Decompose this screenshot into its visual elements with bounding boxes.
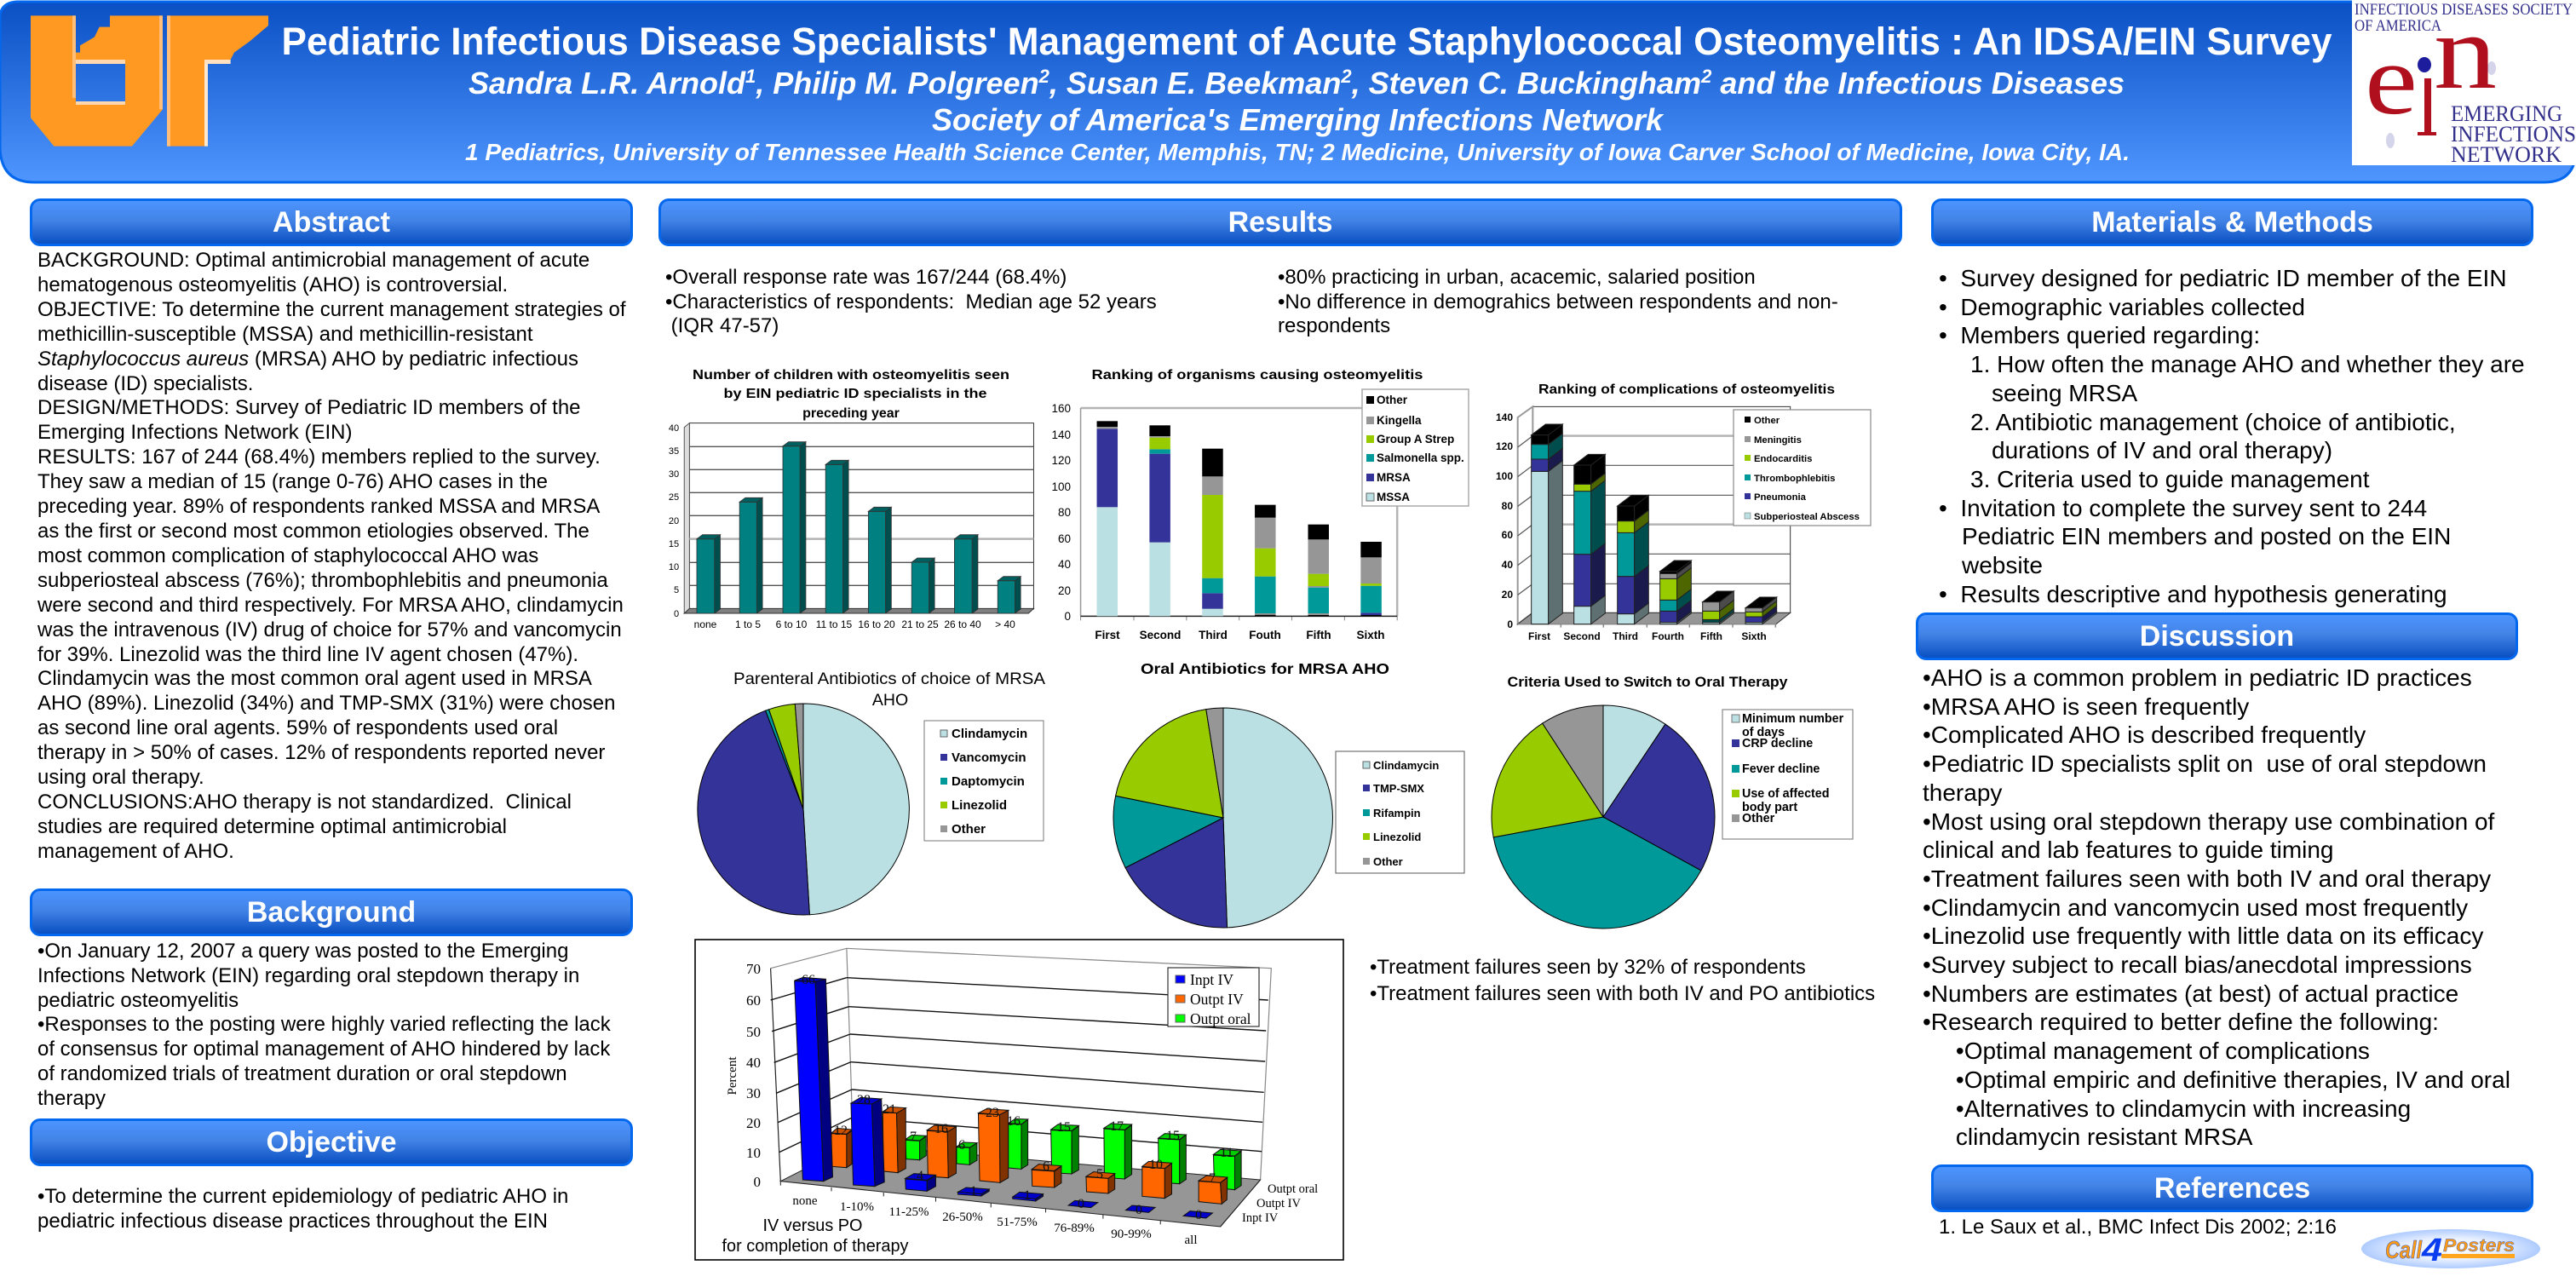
y axis labels xyxy=(669,423,679,619)
icon: Call4Posters logo: 4 xyxy=(2421,1233,2442,1268)
data labels: 1 xyxy=(1024,1188,1031,1203)
heading: Discussion xyxy=(1916,612,2518,660)
text: results summary right: •80% practicing in urban, acacemic, salaried position •No difference in demograhics between respondents and non- respondents xyxy=(1278,266,1838,337)
legend: Inpt IV xyxy=(1190,971,1233,988)
y axis title: Percent xyxy=(726,1056,739,1095)
authors: , Susan E. Beekman xyxy=(1049,66,1341,101)
3D stacked bar chart: complications xyxy=(1496,382,1871,642)
icon: EIN logo: NETWORK xyxy=(2451,142,2562,167)
x axis labels: 11-25% xyxy=(889,1205,929,1219)
legend: Endocarditis xyxy=(1754,454,1812,464)
y axis labels: 40 xyxy=(1058,558,1071,571)
y axis labels: 40 xyxy=(1502,559,1513,571)
text: results summary left: •Overall response rate was 167/244 (68.4%) •Characteristics of respondents: Median age 52 years (IQR 47-57) xyxy=(665,266,1157,337)
legend: TMP-SMX xyxy=(1373,782,1424,795)
chart title: AHO xyxy=(872,691,908,710)
x axis labels: First xyxy=(1528,630,1550,642)
y axis labels: 60 xyxy=(1502,529,1513,541)
data labels: 66 xyxy=(802,973,815,987)
icon: Call4Posters logo xyxy=(2361,1229,2540,1268)
bars: outpatient oral xyxy=(906,1118,1241,1190)
authors: 2 xyxy=(1700,66,1712,87)
legend: Clindamycin xyxy=(1373,759,1439,772)
x axis labels: 26 to 40 xyxy=(944,618,981,630)
chart caption xyxy=(722,1216,908,1256)
legend: Minimum number xyxy=(1742,712,1844,726)
depth axis labels: Outpt oral xyxy=(1268,1182,1318,1196)
y axis labels: 35 xyxy=(669,446,679,457)
icon: EIN logo: OF AMERICA xyxy=(2355,17,2441,35)
data labels: 12 xyxy=(834,1124,848,1138)
x axis labels: all xyxy=(1184,1233,1198,1247)
icon: UT logo xyxy=(31,15,268,147)
x axis labels: Second xyxy=(1563,630,1601,642)
x axis labels: 1-10% xyxy=(840,1200,874,1214)
legend: MSSA xyxy=(1377,491,1410,503)
chart title: Number of children with osteomyelitis seen xyxy=(693,368,1009,382)
x axis labels xyxy=(694,618,1015,630)
x axis labels xyxy=(1095,629,1385,641)
heading: Background xyxy=(30,888,633,936)
text: materials and methods list: • Survey designed for pediatric ID member of the EIN • Demographic variables collected • Members queried regarding: 1. How often the manage AHO and whether they are seeing MRSA 2. Antibiotic management (choice of antibiotic, durations of IV and oral therapy) 3. Criteria used to guide management • Invitation to complete the survey sent to 244 Pediatric EIN members and posted on the EIN website • Results descriptive and hypothesis generating xyxy=(1939,265,2525,607)
legend: Other xyxy=(1377,394,1408,406)
legend: Thrombophlebitis xyxy=(1754,474,1835,484)
y axis labels: 140 xyxy=(1496,411,1513,423)
x axis labels: Sixth xyxy=(1356,629,1385,641)
legend: Kingella xyxy=(1377,414,1422,427)
data labels: 0 xyxy=(1078,1197,1084,1211)
x axis labels: Second xyxy=(1140,629,1181,641)
header banner xyxy=(0,0,2576,182)
data labels: 7 xyxy=(910,1130,917,1144)
chart title: Oral Antibiotics for MRSA AHO xyxy=(1141,660,1389,677)
heading: Materials & Methods: Materials & Methods xyxy=(2091,206,2373,239)
data labels: 11 xyxy=(1220,1146,1233,1160)
legend: Linezolid xyxy=(952,798,1007,813)
title: Pediatric Infectious Disease Specialists' Management of Acute Staphylococcal Osteomyelitis : An IDSA/EIN Survey xyxy=(281,20,2332,63)
y axis labels: 10 xyxy=(746,1145,761,1161)
pie chart: parenteral antibiotics xyxy=(698,670,1045,915)
legend: Outpt IV xyxy=(1190,991,1244,1008)
x axis labels: > 40 xyxy=(995,618,1015,630)
authors: , Philip M. Polgreen xyxy=(755,66,1039,101)
heading: Results: Results xyxy=(1228,206,1332,239)
authors: Society of America's Emerging Infections Network xyxy=(932,102,1665,137)
data labels: 23 xyxy=(986,1106,999,1120)
legend xyxy=(1336,751,1464,873)
text: references: 1. Le Saux et al., BMC Infect Dis 2002; 2:16 xyxy=(1939,1216,2337,1239)
data labels: 21 xyxy=(883,1102,896,1117)
icon: EIN logo: e xyxy=(2365,24,2418,135)
stacked bar chart: organisms xyxy=(1051,368,1469,641)
y axis labels: 120 xyxy=(1051,454,1071,467)
icon: EIN logo xyxy=(2352,0,2576,167)
icon: Call4Posters logo: Posters xyxy=(2443,1236,2515,1256)
y axis labels: 80 xyxy=(1058,506,1071,519)
x axis labels: Third xyxy=(1613,630,1638,642)
heading: References: References xyxy=(2154,1172,2310,1205)
data labels: 28 xyxy=(857,1093,871,1107)
legend: Pneumonia xyxy=(1754,492,1807,503)
y axis labels: 20 xyxy=(669,516,679,526)
legend: Group A Strep xyxy=(1377,433,1454,446)
x axis labels: 51-75% xyxy=(997,1216,1038,1229)
legend: Use of affected xyxy=(1742,787,1830,801)
legend: Other xyxy=(1754,416,1780,426)
bars: outpatient IV xyxy=(831,1107,1228,1204)
heading: Objective: Objective xyxy=(266,1126,397,1159)
data labels: 16 xyxy=(1007,1114,1021,1129)
legend: Other xyxy=(1742,812,1775,825)
data labels: 0 xyxy=(1136,1203,1142,1217)
x axis labels: 26-50% xyxy=(942,1210,983,1224)
pie chart: oral antibiotics xyxy=(1113,660,1464,928)
heading: Abstract: Abstract xyxy=(273,206,390,239)
legend: CRP decline xyxy=(1742,737,1813,750)
x axis labels: First xyxy=(1095,629,1120,641)
y axis labels: 50 xyxy=(746,1024,761,1040)
legend: Fever decline xyxy=(1742,762,1820,776)
data labels: 6 xyxy=(958,1138,965,1153)
legend: Outpt oral xyxy=(1190,1010,1251,1027)
legend: Salmonella spp. xyxy=(1377,451,1464,464)
text: background: •On January 12, 2007 a query was posted to the Emerging Infections Network (EIN) regarding oral stepdown therapy in pediatric osteomyelitis •Responses to the posting were highly varied reflecting the lack of consensus for optimal management of AHO hindered by lack of randomized trials of treatment duration or oral stepdown therapy xyxy=(37,940,611,1110)
y axis labels: 70 xyxy=(746,961,761,977)
y axis labels: 20 xyxy=(1058,584,1071,597)
y axis labels: 10 xyxy=(669,562,679,572)
legend: of days xyxy=(1742,726,1785,739)
y axis labels: 30 xyxy=(669,469,679,480)
x axis labels: none xyxy=(694,618,717,630)
y axis labels: 15 xyxy=(669,539,679,549)
legend: Clindamycin xyxy=(952,727,1027,741)
x axis labels xyxy=(792,1194,1198,1247)
chart caption: IV versus PO xyxy=(763,1216,862,1235)
chart title: Parenteral Antibiotics of choice of MRSA xyxy=(733,670,1045,688)
legend: Vancomycin xyxy=(952,750,1026,765)
depth axis labels xyxy=(1242,1182,1318,1225)
bar chart: children with osteomyelitis xyxy=(669,368,1033,630)
bars: inpatient IV xyxy=(795,977,1212,1218)
chart title: Criteria Used to Switch to Oral Therapy xyxy=(1508,674,1788,690)
chart title: preceding year xyxy=(802,406,900,421)
y axis labels: 30 xyxy=(746,1085,761,1101)
authors: and the Infectious Diseases xyxy=(1711,66,2125,101)
y axis labels: 0 xyxy=(674,609,679,619)
data labels: 1 xyxy=(970,1184,977,1199)
y axis labels xyxy=(746,961,761,1190)
heading: Objective xyxy=(30,1118,633,1166)
y axis labels: 20 xyxy=(1502,589,1513,601)
data labels xyxy=(802,973,1233,1222)
chart title: by EIN pediatric ID specialists in the xyxy=(724,387,987,401)
x axis labels: 1 to 5 xyxy=(735,618,761,630)
y axis labels: 0 xyxy=(1064,610,1071,623)
authors: , Steven C. Buckingham xyxy=(1351,66,1701,101)
x axis labels: 11 to 15 xyxy=(816,618,853,630)
legend xyxy=(1168,968,1259,1027)
data labels: 6 xyxy=(1043,1159,1049,1174)
chart caption: for completion of therapy xyxy=(722,1237,908,1256)
legend: Subperiosteal Abscess xyxy=(1754,512,1860,522)
text: objective: •To determine the current epidemiology of pediatric AHO in pediatric infectious disease practices throughout the EIN xyxy=(37,1185,568,1233)
legend xyxy=(1362,389,1469,506)
data labels: 5 xyxy=(1096,1167,1103,1182)
data labels: 4 xyxy=(917,1169,923,1183)
legend xyxy=(1734,410,1871,526)
legend: Other xyxy=(952,822,986,837)
data labels: 10 xyxy=(1149,1158,1163,1172)
authors xyxy=(469,66,2125,137)
text: discussion list: •AHO is a common problem in pediatric ID practices •MRSA AHO is seen frequently •Complicated AHO is described frequently •Pediatric ID specialists split on use of oral stepdown therapy •Most using oral stepdown therapy use combination of clinical and lab features to guide timing •Treatment failures seen with both IV and oral therapy •Clindamycin and vancomycin used most frequently •Linezolid use frequently with little data on its efficacy •Survey subject to recall bias/anecdotal impressions •Numbers are estimates (at best) of actual practice •Research required to better define the following: •Optimal management of complications •Optimal empiric and definitive therapies, IV and oral •Alternatives to clindamycin with increasing clindamycin resistant MRSA xyxy=(1923,664,2510,1150)
heading: Materials & Methods xyxy=(1931,198,2533,246)
y axis labels: 100 xyxy=(1496,470,1513,482)
x axis labels: Third xyxy=(1199,629,1228,641)
heading: Abstract xyxy=(30,198,633,246)
y axis labels: 40 xyxy=(669,423,679,434)
legend: Meningitis xyxy=(1754,435,1802,446)
x axis labels: Fourth xyxy=(1652,630,1684,642)
3D bar chart: IV versus PO xyxy=(695,940,1343,1260)
depth axis labels: Inpt IV xyxy=(1242,1211,1279,1225)
legend: body part xyxy=(1742,801,1797,814)
x axis labels: Sixth xyxy=(1741,630,1767,642)
x axis labels: Fifth xyxy=(1306,629,1331,641)
y axis labels: 20 xyxy=(746,1115,761,1131)
y axis labels: 0 xyxy=(1507,618,1513,630)
x axis labels: Fifth xyxy=(1700,630,1722,642)
legend: Other xyxy=(1373,855,1403,868)
data labels: 15 xyxy=(1057,1120,1071,1135)
y axis labels xyxy=(1051,402,1071,623)
data labels: 17 xyxy=(1110,1119,1124,1134)
depth axis labels: Outpt IV xyxy=(1256,1197,1301,1210)
legend xyxy=(1722,710,1853,839)
x axis labels: 6 to 10 xyxy=(776,618,808,630)
icon: Call4Posters logo: Call xyxy=(2385,1237,2423,1264)
y axis labels: 100 xyxy=(1051,480,1071,493)
y axis labels: 60 xyxy=(746,992,761,1009)
affiliations: 1 Pediatrics, University of Tennessee Health Science Center, Memphis, TN; 2 Medicine, University of Iowa Carver School of Medicine, Iowa City, IA. xyxy=(465,139,2130,165)
x axis labels: 90-99% xyxy=(1111,1228,1152,1241)
legend: Daptomycin xyxy=(952,774,1025,789)
y axis labels: 140 xyxy=(1051,428,1071,441)
x axis labels xyxy=(1528,630,1767,642)
y axis labels xyxy=(1496,411,1513,630)
chart title xyxy=(733,670,1045,710)
data labels: 7 xyxy=(1209,1171,1216,1186)
data labels: 15 xyxy=(1166,1129,1180,1143)
y axis labels: 80 xyxy=(1502,500,1513,512)
y axis labels: 25 xyxy=(669,492,679,503)
icon: EIN logo: EMERGING xyxy=(2451,101,2562,126)
authors: 1 xyxy=(745,66,756,87)
authors: 2 xyxy=(1038,66,1050,87)
y axis labels: 40 xyxy=(746,1055,761,1071)
data labels: 16 xyxy=(934,1122,948,1136)
authors: Sandra L.R. Arnold xyxy=(469,66,745,101)
heading: Results xyxy=(658,198,1902,246)
x axis labels: none xyxy=(792,1194,818,1208)
y axis labels: 60 xyxy=(1058,532,1071,545)
heading: References xyxy=(1931,1164,2533,1212)
y axis labels: 5 xyxy=(674,585,679,595)
x axis labels: 16 to 20 xyxy=(858,618,895,630)
legend xyxy=(924,721,1044,841)
heading: Discussion: Discussion xyxy=(2140,620,2294,653)
pie chart: criteria to switch to oral therapy xyxy=(1492,674,1853,929)
text: abstract: BACKGROUND: Optimal antimicrobial management of acute hematogenous osteomyelitis (AHO) is controversial. OBJECTIVE: To determine the current management strategies of methicillin-susceptible (MSSA) and methicillin-resistant Staphylococcus aureus (MRSA) AHO by pediatric infectious disease (ID) specialists. DESIGN/METHODS: Survey of Pediatric ID members of the Emerging Infections Network (EIN) RESULTS: 167 of 244 (68.4%) members replied to the survey. They saw a median of 15 (range 0-76) AHO cases in the preceding year. 89% of respondents ranked MSSA and MRSA as the first or second most common etiologies observed. The most common complication of staphylococcal AHO was subperiosteal abscess (76%); thrombophlebitis and pneumonia were second and third respectively. For MRSA AHO, clindamycin was the intravenous (IV) drug of choice for 57% and vancomycin for 39%. Linezolid was the third line IV agent chosen (47%). Clindamycin was the most common oral agent used in MRSA AHO (89%). Linezolid (34%) and TMP-SMX (31%) were chosen as second line oral agents. 59% of respondents used oral therapy in > 50% of cases. 12% of respondents reported never using oral therapy. CONCLUSIONS:AHO therapy is not standardized. Clinical studies are required determine optimal antimicrobial management of AHO. xyxy=(37,249,626,863)
legend: Rifampin xyxy=(1373,807,1421,819)
authors: 2 xyxy=(1340,66,1352,87)
chart title: Ranking of complications of osteomyelitis xyxy=(1538,382,1835,397)
x axis labels: 76-89% xyxy=(1054,1222,1095,1235)
data labels: 0 xyxy=(1195,1208,1202,1222)
chart title: Ranking of organisms causing osteomyelitis xyxy=(1092,368,1423,382)
legend: Linezolid xyxy=(1373,831,1421,843)
y axis labels: 160 xyxy=(1051,402,1071,415)
y axis labels: 0 xyxy=(753,1174,761,1190)
x axis labels: 21 to 25 xyxy=(901,618,939,630)
y axis labels: 120 xyxy=(1496,440,1513,452)
heading: Background: Background xyxy=(247,896,416,929)
legend: MRSA xyxy=(1377,471,1411,484)
text: treatment failures: •Treatment failures seen by 32% of respondents •Treatment failures seen with both IV and PO antibiotics xyxy=(1370,956,1875,1005)
x axis labels: Fouth xyxy=(1249,629,1281,641)
chart title xyxy=(693,368,1009,421)
